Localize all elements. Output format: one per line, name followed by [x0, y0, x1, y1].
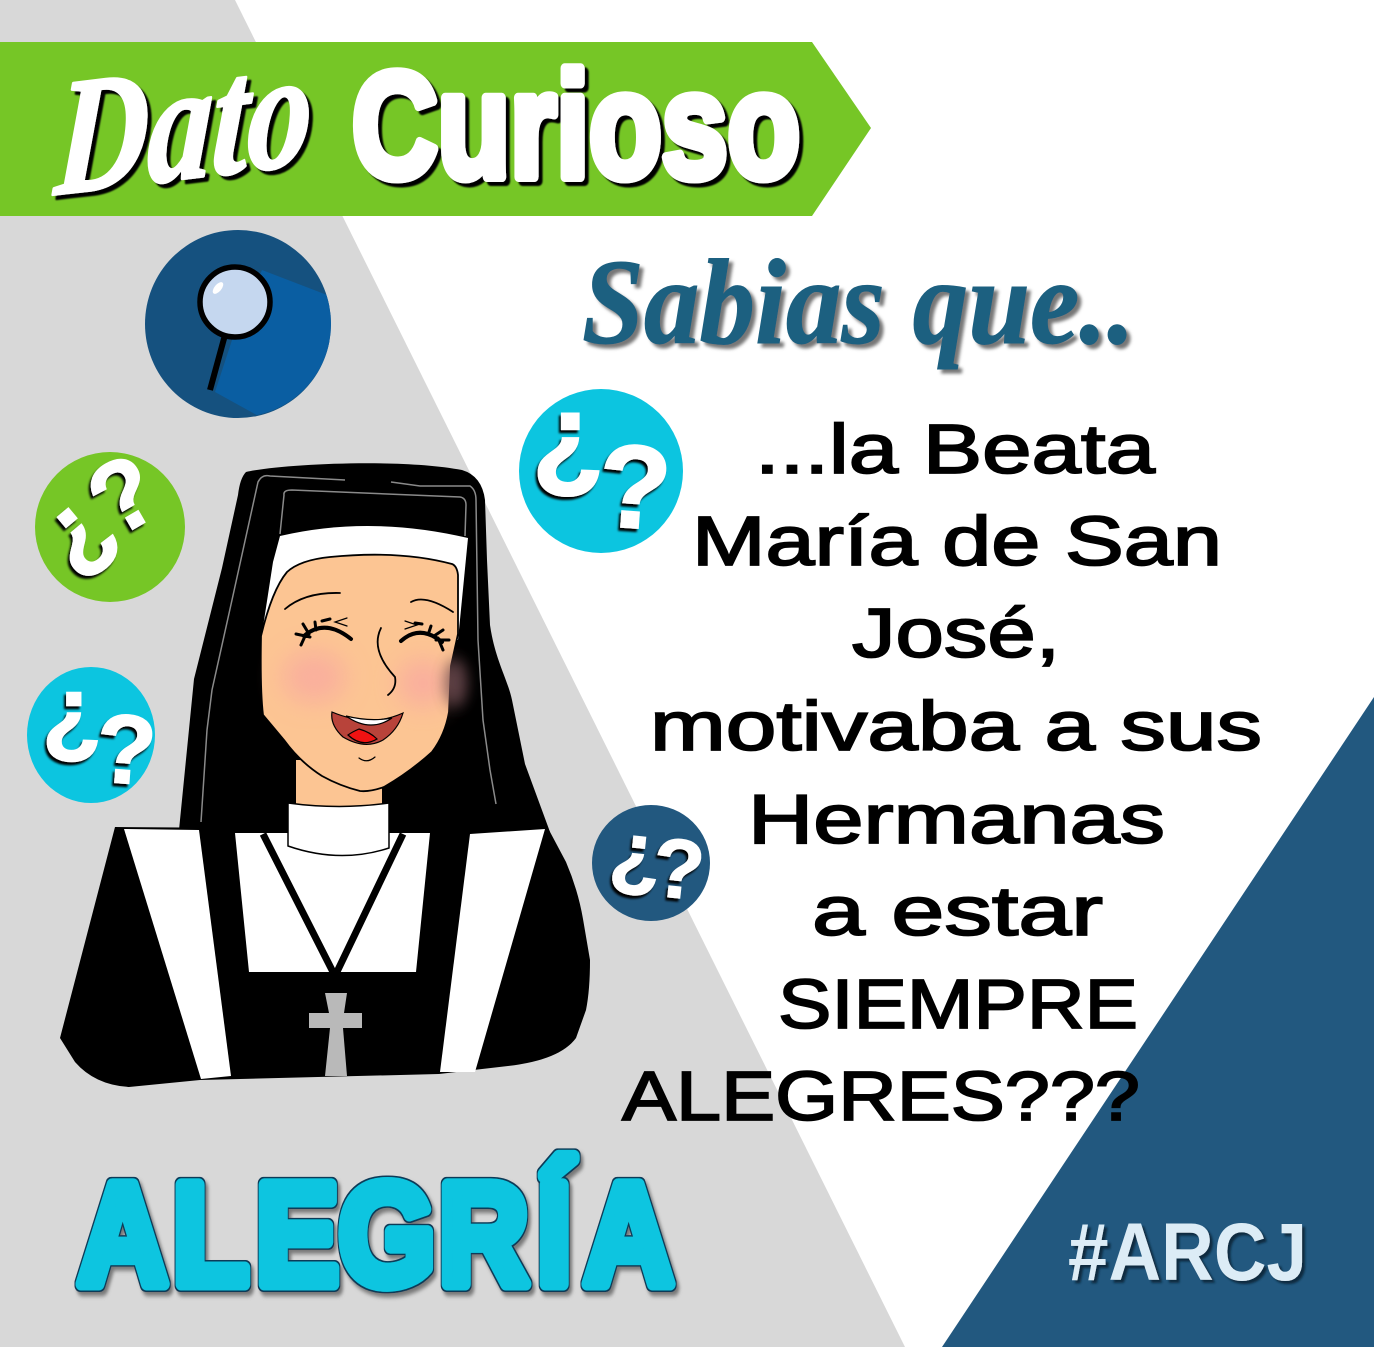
cross pendant [309, 993, 362, 1076]
icon: green question bubble: ¿? [14, 432, 178, 591]
body text: question about Beata María de San José: motivaba a sus [650, 687, 1262, 765]
icon: blue question bubble: ¿? [606, 802, 709, 918]
icon: cyan question bubble large: ¿? [532, 370, 675, 556]
face [261, 555, 458, 791]
title: Dato Curioso [50, 14, 800, 231]
icon: cyan question bubble left: ¿? [42, 656, 160, 806]
white bib [235, 833, 430, 972]
body text: question about Beata María de San José [622, 410, 1262, 1135]
title: Dato Curioso: Curioso [352, 41, 800, 209]
body text: question about Beata María de San José: ALEGRES??? [622, 1057, 1140, 1135]
icon: magnifying glass [145, 230, 340, 420]
white coif [261, 526, 468, 640]
title: Dato Curioso: Dato [50, 14, 317, 231]
body text: question about Beata María de San José: a estar [812, 872, 1103, 950]
illustration: smiling nun [60, 463, 590, 1087]
necklace cord [263, 834, 403, 976]
blush [282, 651, 346, 703]
veil fold lines [201, 476, 496, 822]
body text: question about Beata María de San José: José, [852, 594, 1060, 672]
body text: question about Beata María de San José: ...la Beata [755, 410, 1155, 488]
neck [296, 760, 382, 806]
mouth [332, 712, 403, 744]
blue corner triangle [942, 697, 1374, 1347]
body text: question about Beata María de San José: María de San [692, 502, 1222, 580]
green title banner [0, 42, 871, 216]
eyebrows, eyes and nose [285, 593, 453, 761]
hashtag: #ARCJ: #ARCJ [1068, 1207, 1307, 1298]
word: ALEGRÍA: ALEGRÍA [78, 1154, 673, 1315]
heading: Sabias que..: Sabias que.. [582, 235, 1135, 370]
nun veil [179, 463, 550, 860]
nun habit body [60, 827, 590, 1087]
body text: question about Beata María de San José: SIEMPRE [778, 965, 1138, 1043]
collar [288, 803, 389, 856]
glow on veil [445, 659, 467, 707]
body text: question about Beata María de San José: Hermanas [748, 780, 1165, 858]
white scapular stripes [124, 829, 231, 1079]
